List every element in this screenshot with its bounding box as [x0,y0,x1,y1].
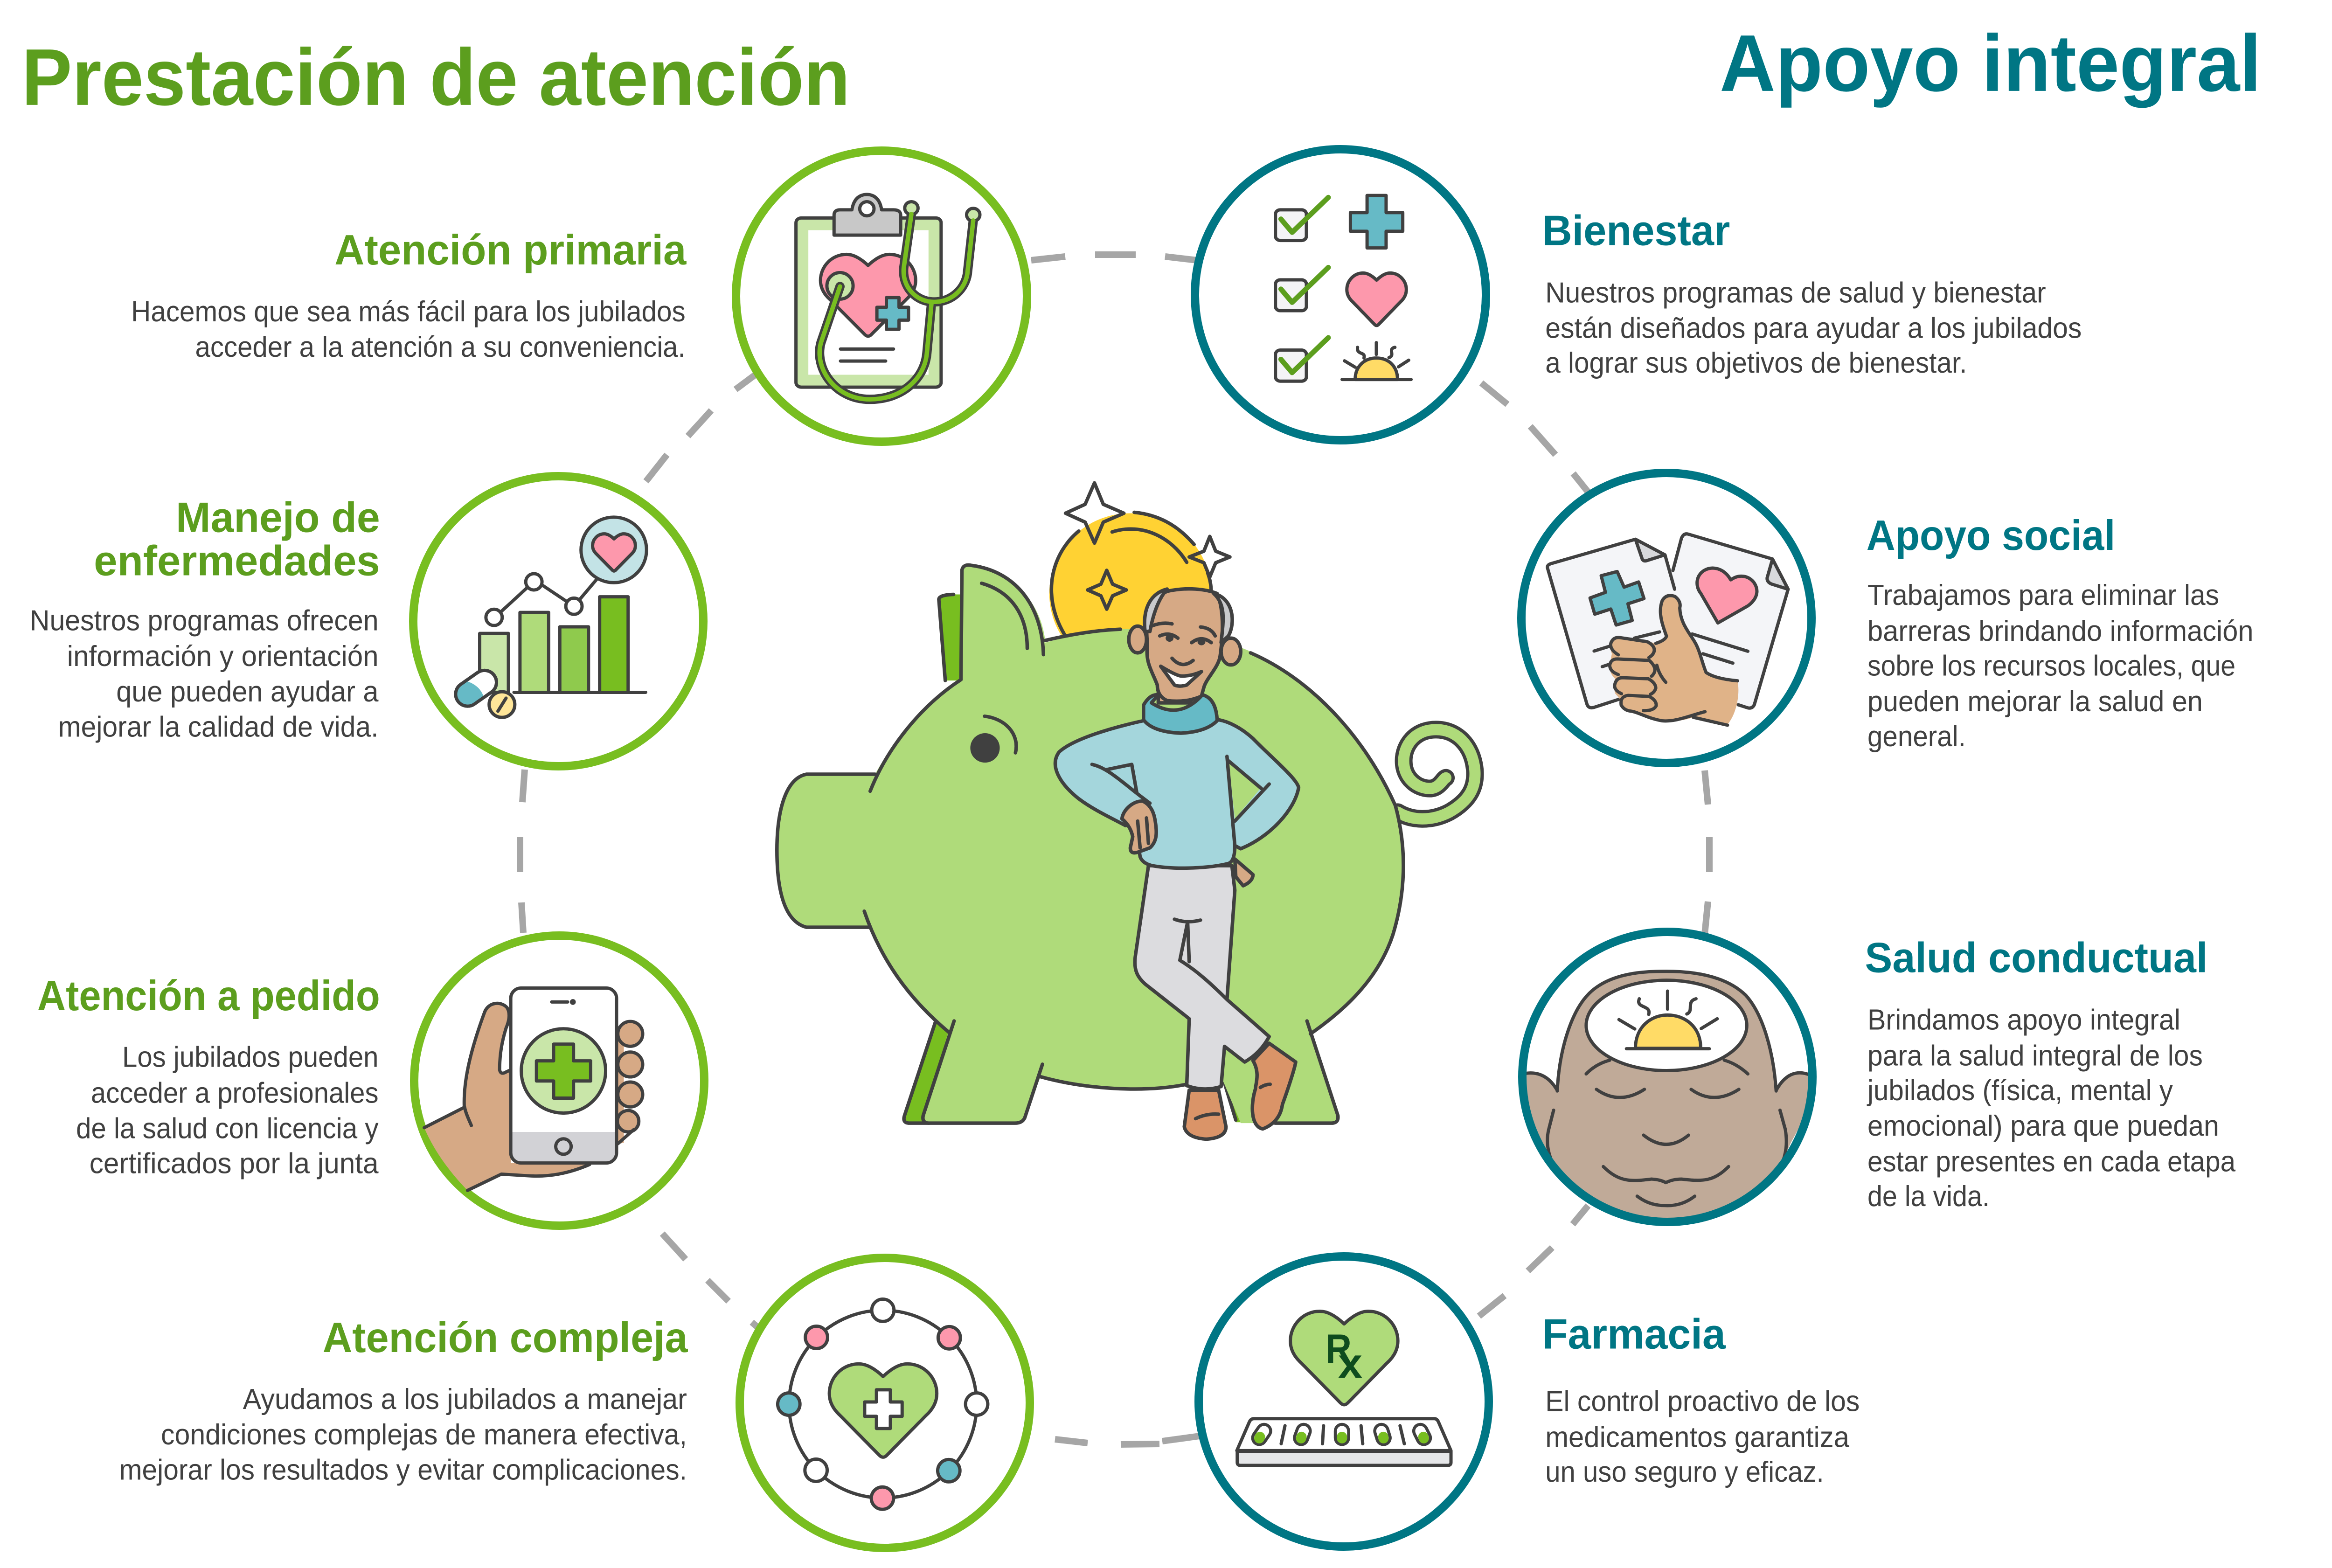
text block: Salud conductual [1865,935,2235,1213]
text block: Bienestar: Bienestar [1542,208,1730,255]
text block: Apoyo social: barreras brindando información [1867,615,2253,647]
text block: Manejo de enfermedades: Nuestros programas ofrecen [30,604,379,637]
man leaning on piggy bank [1055,589,1298,1139]
icon: calm face with sun in mind [1521,971,1813,1228]
text block: Farmacia: El control proactivo de los [1545,1386,1860,1418]
text block: Apoyo social: pueden mejorar la salud en [1867,686,2203,718]
text block: Apoyo social: Trabajamos para eliminar las [1867,579,2219,611]
text block: Manejo de enfermedades: información y orientación [67,640,379,673]
text block: Manejo de enfermedades: que pueden ayudar a [116,676,379,708]
text block: Manejo de enfermedades [30,494,380,743]
icon: documents and thumbs up [1548,534,1788,725]
panel: bienestar icon circle [1195,149,1486,440]
text block: Atención a pedido: de la salud con licencia y [76,1112,379,1145]
text block: Manejo de enfermedades: Manejo de [176,494,380,541]
panel: farmacia icon circle [1199,1256,1489,1547]
text block: Salud conductual: Salud conductual [1865,935,2207,982]
text block: Apoyo social: general. [1867,721,1966,753]
icon: hand holding phone [424,988,643,1190]
text block: Atención a pedido: Los jubilados pueden [122,1041,379,1074]
panel: manejo de enfermedades icon circle [413,476,703,766]
text block: Atención a pedido: acceder a profesionales [91,1077,379,1109]
piggy bank [777,565,1475,1123]
text block: Atención compleja: Atención compleja [323,1314,688,1361]
text block: Atención compleja [119,1314,688,1486]
text block: Atención primaria [131,227,687,363]
text block: Bienestar: están diseñados para ayudar a los jubilados [1545,312,2082,344]
panel: salud conductual icon circle [1521,932,1813,1228]
text block: Salud conductual: Brindamos apoyo integral [1867,1004,2180,1036]
text block: Apoyo social: sobre los recursos locales, que [1867,650,2235,682]
text block: Salud conductual: estar presentes en cada etapa [1867,1145,2235,1178]
panel: atención compleja icon circle [740,1258,1030,1548]
icon: heart surrounded by care network [777,1299,988,1509]
icon: Rx heart and pill tray [1237,1311,1451,1465]
title: Apoyo integral: Apoyo integral [1720,18,2261,108]
text block: Atención compleja: condiciones complejas de manera efectiva, [161,1419,687,1451]
text block: Bienestar: Nuestros programas de salud y bienestar [1545,277,2046,309]
text block: Bienestar [1542,208,2082,379]
panel: atención a pedido icon circle [414,936,704,1226]
sparkle stars [1066,483,1230,609]
text block: Salud conductual: de la vida. [1867,1180,1990,1213]
icon: Rx heart and pill tray: R [1326,1325,1352,1372]
text block: Farmacia: medicamentos garantiza [1545,1421,1849,1453]
text block: Salud conductual: para la salud integral de los [1867,1040,2203,1072]
text block: Atención compleja: Ayudamos a los jubilados a manejar [243,1383,687,1415]
icon: checklist with cross, heart and sun [1276,195,1411,381]
text block: Manejo de enfermedades: enfermedades [94,537,380,584]
text block: Salud conductual: jubilados (física, mental y [1867,1075,2173,1107]
illustration: piggy bank with smiling man [777,483,1475,1139]
coin behind piggy bank [1049,513,1211,674]
icon: clipboard with heart and stethoscope [796,194,980,399]
text block: Apoyo social [1867,512,2253,753]
title: Prestación de atención: Prestación de atención [21,32,850,122]
icon: bar chart with heart and pills [451,517,646,717]
text block: Atención a pedido: certificados por la junta [90,1148,379,1180]
text block: Bienestar: a lograr sus objetivos de bienestar. [1545,347,1967,379]
text block: Atención primaria: Hacemos que sea más fácil para los jubilados [131,296,686,328]
text block: Atención compleja: mejorar los resultados y evitar complicaciones. [119,1454,687,1486]
text block: Salud conductual: emocional) para que puedan [1867,1110,2219,1142]
text block: Apoyo social: Apoyo social [1867,512,2115,559]
text block: Farmacia: Farmacia [1542,1311,1726,1358]
text block: Manejo de enfermedades: mejorar la calidad de vida. [58,711,379,743]
text block: Atención primaria: acceder a la atención a su conveniencia. [195,331,686,363]
text block: Atención a pedido [37,972,380,1180]
icon: Rx heart and pill tray: x [1338,1340,1362,1387]
panel: atención primaria icon circle [736,151,1027,442]
text block: Atención primaria: Atención primaria [334,227,687,274]
text block: Farmacia [1542,1311,1860,1488]
panel: apoyo social icon circle [1521,473,1811,763]
text block: Atención a pedido: Atención a pedido [37,972,380,1020]
text block: Farmacia: un uso seguro y eficaz. [1545,1456,1824,1488]
